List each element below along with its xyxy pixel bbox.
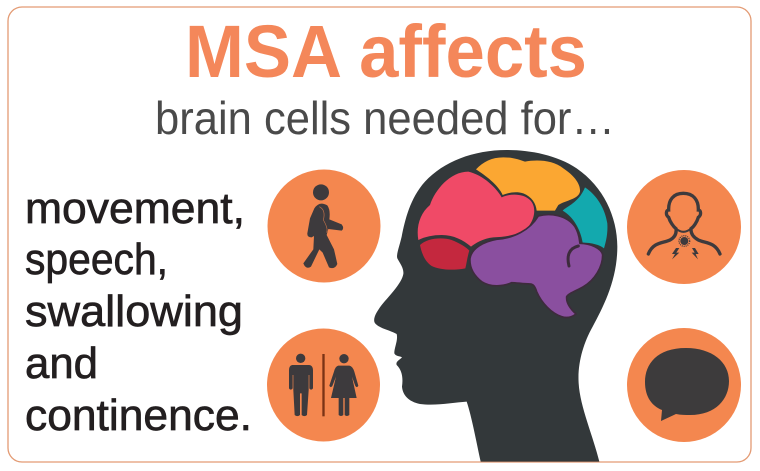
brain region: purple: [470, 215, 603, 317]
icon: speech bubble: [627, 328, 741, 442]
text block: affected functions: [25, 184, 252, 440]
man figure: [289, 354, 313, 416]
icon: throat and neck: [627, 170, 741, 284]
text block: affected functions: movement,: [25, 184, 245, 233]
subtitle: brain cells needed for…: [155, 92, 615, 144]
text block: affected functions: speech,: [25, 235, 168, 284]
head with brain: [374, 150, 617, 462]
text block: affected functions: swallowing: [25, 287, 243, 336]
title: MSA affects: [185, 10, 587, 93]
brain region: teal: [563, 187, 607, 248]
brain region: pink: [418, 172, 534, 247]
divider: [322, 354, 325, 416]
icon: restroom figures: [267, 328, 380, 442]
icon: walking person: [268, 170, 380, 282]
brain region: orange: [476, 157, 580, 211]
head silhouette: [374, 150, 617, 462]
woman figure: [329, 354, 358, 416]
text block: affected functions: continence.: [25, 391, 252, 440]
brain region: dark red: [420, 238, 469, 270]
text block: affected functions: and: [25, 339, 98, 388]
brain fold: [568, 246, 578, 266]
